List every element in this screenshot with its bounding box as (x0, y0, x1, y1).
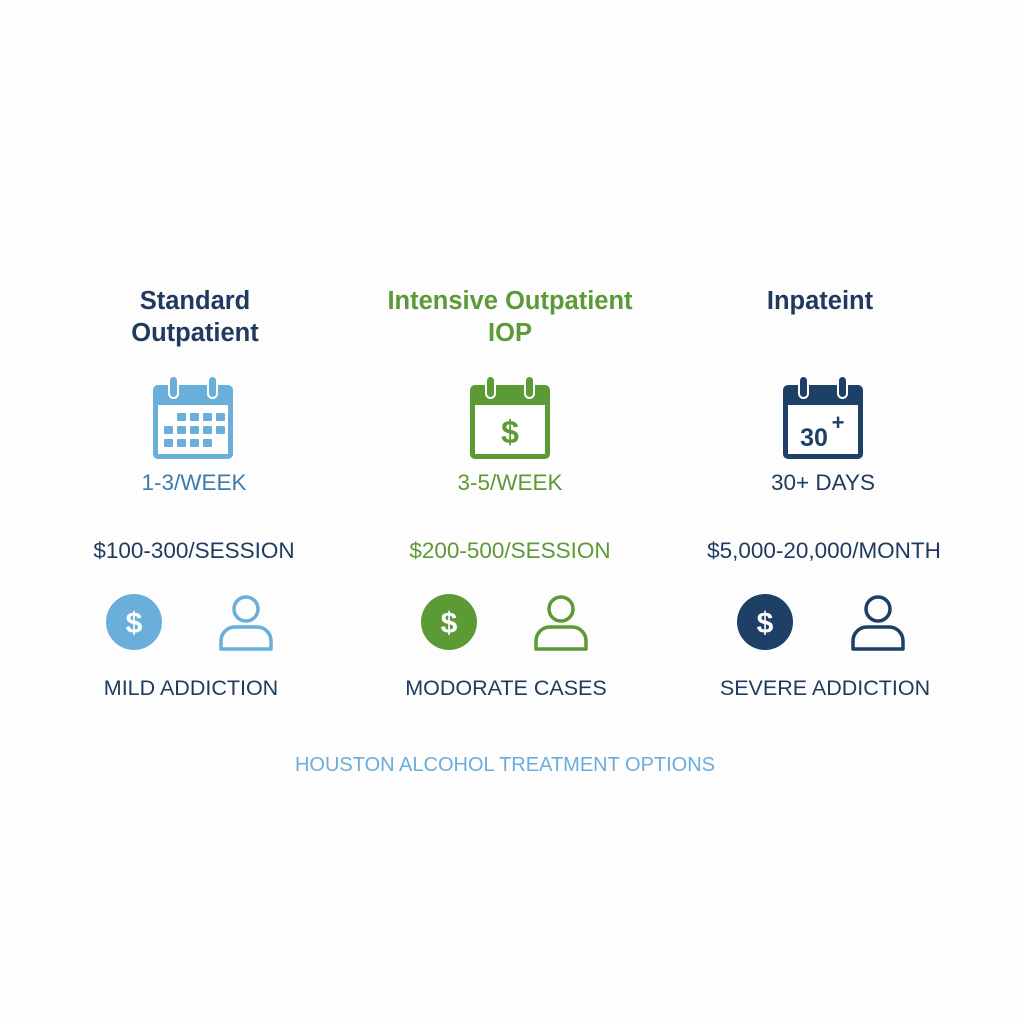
icon: calendar dollar: $ (501, 414, 519, 450)
heading: intensive outpatient: Intensive Outpatient (387, 287, 633, 315)
cost: standard: $100-300/SESSION (93, 538, 295, 563)
label: severe addiction: SEVERE ADDICTION (720, 676, 930, 700)
icons: dollar and person inpatient: $ (757, 607, 774, 640)
icons: dollar and person IOP (421, 594, 588, 651)
heading: intensive outpatient (387, 287, 633, 347)
heading: intensive outpatient: IOP (488, 319, 532, 347)
heading: standard outpatient (131, 287, 259, 347)
footer title: HOUSTON ALCOHOL TREATMENT OPTIONS (295, 754, 715, 776)
icons: dollar and person IOP: $ (441, 607, 458, 640)
icon: calendar 30+ (783, 377, 863, 459)
heading: standard outpatient: Outpatient (131, 319, 259, 347)
cost: IOP: $200-500/SESSION (409, 538, 611, 563)
icons: dollar and person standard: $ (126, 607, 143, 640)
icon: calendar grid (153, 377, 233, 459)
heading: inpatient: Inpateint (767, 287, 873, 315)
label: mild addiction: MILD ADDICTION (104, 676, 278, 700)
icon: calendar 30+: 30 (800, 424, 828, 452)
label: moderate cases: MODORATE CASES (405, 676, 607, 700)
icons: dollar and person standard (106, 594, 273, 651)
frequency: 30+ days: 30+ DAYS (771, 470, 875, 495)
heading: standard outpatient: Standard (140, 287, 250, 315)
cost: inpatient: $5,000-20,000/MONTH (707, 538, 941, 563)
icons: dollar and person inpatient (737, 594, 905, 651)
frequency: 3-5/week: 3-5/WEEK (457, 470, 563, 495)
icon: calendar dollar (470, 377, 550, 459)
frequency: 1-3/week: 1-3/WEEK (141, 470, 247, 495)
icon: calendar 30+: + (832, 410, 844, 435)
